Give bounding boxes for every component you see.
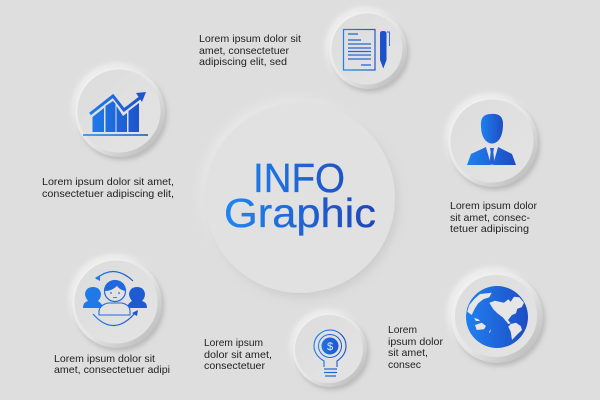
icon: globe <box>466 286 528 348</box>
text: globe: Lorem <box>388 325 417 336</box>
text: light bulb: consectetuer <box>204 361 266 372</box>
panel: document <box>325 7 409 92</box>
icon: businessman <box>467 114 516 165</box>
icon: rising bar chart <box>83 92 148 135</box>
text: document: Lorem ipsum dolor sit <box>199 34 301 45</box>
text: businessman <box>450 201 538 235</box>
panel: globe <box>447 267 545 366</box>
text: light bulb: dolor sit amet, <box>204 350 272 361</box>
text: globe: consec <box>388 360 421 371</box>
title: INFO <box>253 155 345 201</box>
text: people: Lorem ipsum dolor sit <box>54 354 155 365</box>
text: globe <box>388 325 444 371</box>
text: businessman: sit amet, consec- <box>450 213 530 224</box>
panel: chart <box>72 63 167 160</box>
icon: light bulb with dollar coin: $ <box>327 341 333 353</box>
icon: document and pen <box>344 30 390 70</box>
text: document: amet, consectetuer <box>199 46 290 57</box>
title <box>224 155 376 236</box>
text: chart: Lorem ipsum dolor sit amet, <box>42 177 174 188</box>
text: chart: consectetuer adipiscing elit, <box>42 189 174 200</box>
text: globe: sit amet, <box>388 348 428 359</box>
panel: businessman <box>445 93 540 190</box>
panel: light bulb <box>290 309 369 390</box>
text: chart <box>42 177 174 200</box>
text: globe: ipsum dolor <box>388 337 444 348</box>
text: people <box>54 354 170 376</box>
panel: people <box>69 254 164 351</box>
icon: people with cycle arrows <box>83 271 147 326</box>
text: light bulb <box>204 338 272 372</box>
text: businessman: tetuer adipiscing <box>450 224 529 235</box>
text: businessman: Lorem ipsum dolor <box>450 201 538 212</box>
panel: central circle <box>201 99 398 297</box>
text: light bulb: Lorem ipsum <box>204 338 263 349</box>
title: Graphic <box>224 190 376 236</box>
text: people: amet, consectetuer adipi <box>54 365 170 376</box>
text: document: adipiscing elit, sed <box>199 57 287 68</box>
text: document <box>199 34 301 68</box>
